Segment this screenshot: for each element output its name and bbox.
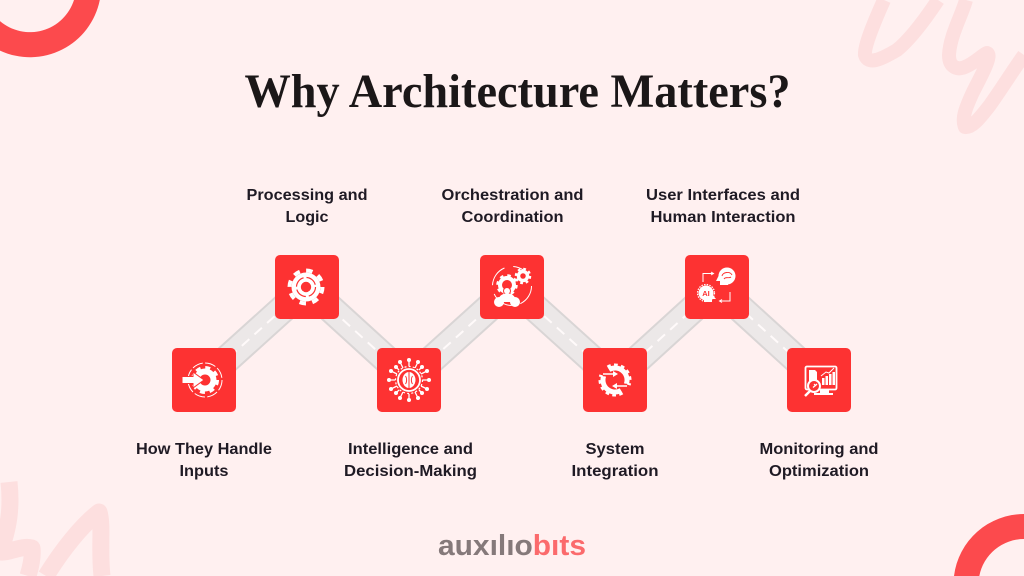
label: Processing and [246, 187, 368, 204]
label [344, 441, 477, 480]
icon: AI and human heads exchange: AI [702, 289, 710, 298]
decoration: bottom-left scribble [0, 482, 102, 576]
decoration: bottom-right ring [954, 514, 1024, 576]
label: Inputs [180, 463, 228, 480]
label: Intelligence and [348, 441, 473, 458]
label [442, 187, 584, 226]
label: User Interfaces and [646, 187, 800, 204]
label: Monitoring and [760, 441, 878, 458]
step 3: Intelligence and Decision-Making [344, 348, 477, 480]
label: System [586, 441, 644, 458]
step 6: User Interfaces and Human Interaction [646, 187, 800, 319]
label: Integration [572, 463, 658, 480]
icon: AI and human heads exchange [685, 255, 749, 319]
label: How They Handle [136, 441, 272, 458]
zigzag road [204, 287, 819, 380]
step 4: Orchestration and Coordination [442, 187, 584, 319]
label: Decision-Making [344, 463, 477, 480]
icon: monitor with charts and magnifier [787, 348, 851, 412]
label: Human Interaction [650, 209, 796, 226]
step 7: Monitoring and Optimization [760, 348, 878, 480]
icon: gear with sync arrows [583, 348, 647, 412]
icon: gears and person in cycle [480, 255, 544, 319]
label [760, 441, 878, 480]
logo: auxılıobıts [438, 530, 586, 562]
step 5: System Integration [572, 348, 658, 480]
icon: input arrow into gear [172, 348, 236, 412]
label [246, 187, 368, 226]
step 2: Processing and Logic [246, 187, 368, 319]
label: Logic [286, 209, 329, 226]
label [136, 441, 272, 480]
label [646, 187, 800, 226]
label: Orchestration and [442, 187, 584, 204]
icon: gear with arrows [275, 255, 339, 319]
decoration: top-left ring [0, 0, 100, 57]
label [572, 441, 658, 480]
step 1: How They Handle Inputs [136, 348, 272, 480]
title: Why Architecture Matters? [244, 65, 790, 118]
label: Coordination [462, 209, 564, 226]
decoration: top-right scribble [865, 0, 1024, 127]
icon: brain circuit [377, 348, 441, 412]
label: Optimization [769, 463, 869, 480]
